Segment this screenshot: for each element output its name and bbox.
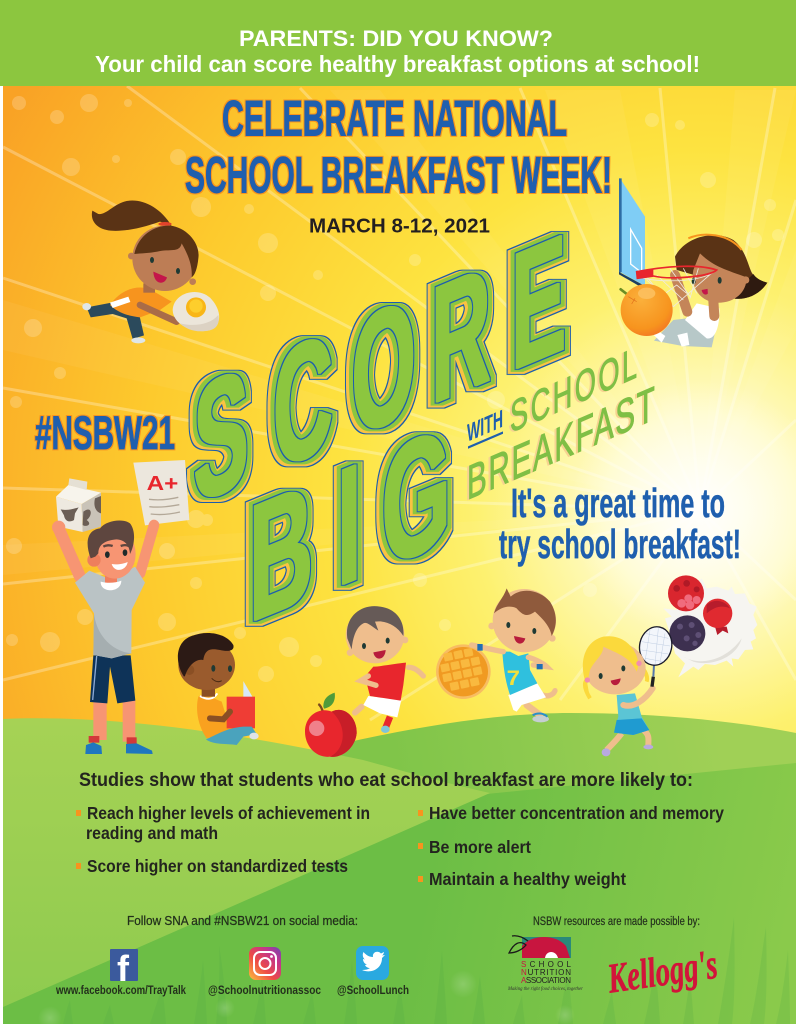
logo: Kellogg's: Kellogg's (604, 942, 720, 1003)
social handles: @Schoolnutritionassoc (208, 983, 321, 997)
date: MARCH 8-12, 2021 (309, 214, 490, 238)
social media heading: Follow SNA and #NSBW21 on social media: (127, 913, 358, 928)
character: boy with waffle (472, 588, 556, 722)
benefits list: left column: Reach higher levels of achievement in (87, 803, 370, 823)
social handles: www.facebook.com/TrayTalk (55, 983, 186, 997)
sponsors heading: NSBW resources are made possible by: (533, 916, 700, 928)
icon: facebook (110, 948, 138, 989)
logo lettering: SCORE: SCORE (193, 200, 565, 541)
logo: School Nutrition Association: Making the right food choices, together (507, 987, 583, 992)
icon: facebook: f (117, 948, 130, 989)
benefits list: right column: Be more alert (429, 837, 531, 857)
character: girl with egg (82, 201, 219, 343)
character: boy running (346, 606, 423, 733)
logo lettering: BIG: BIG (248, 392, 450, 659)
title: Celebrate National School Breakfast Week (185, 90, 612, 204)
logo: School Nutrition Association: NUTRITION (521, 968, 571, 977)
A+ paper (133, 460, 189, 525)
logo: School Nutrition Association: S CHOOL (521, 960, 572, 969)
logo lettering: with school breakfast: SCHOOL (510, 337, 637, 442)
logo lettering: with school breakfast: BREAKFAST (467, 376, 655, 511)
icon: twitter (356, 946, 389, 980)
icon: instagram (249, 947, 281, 980)
A+ paper: A+ (147, 472, 178, 495)
benefits list: right column (418, 803, 724, 889)
header banner (0, 0, 796, 86)
header banner: Your child can score healthy breakfast options at school! (95, 51, 700, 77)
icon: apple (305, 693, 357, 757)
character: girl with tennis racket (583, 624, 675, 756)
logo lettering: with school breakfast: WITH (467, 404, 503, 448)
benefits list: left column (76, 803, 370, 876)
boy body (59, 530, 80, 577)
hashtag: #NSBW21 (35, 406, 175, 459)
benefits heading: Studies show that students who eat school breakfast are more likely to: (79, 769, 693, 791)
logo: School Nutrition Association (507, 936, 583, 992)
benefits list: left column: Score higher on standardized tests (87, 856, 348, 876)
title: Celebrate National School Breakfast Week: CELEBRATE NATIONAL (222, 90, 567, 146)
icon: berries and milk splash (663, 575, 757, 677)
tagline (499, 480, 741, 567)
character: boy reading (178, 633, 259, 745)
social handles: @SchoolLunch (337, 983, 409, 997)
benefits list: right column: Maintain a healthy weight (429, 869, 626, 889)
character: girl dunking orange (619, 178, 767, 347)
character: boy with waffle: 7 (507, 666, 520, 690)
header banner: PARENTS: DID YOU KNOW? (239, 26, 553, 51)
milk carton (56, 478, 101, 532)
logo: School Nutrition Association: ASSOCIATION (521, 976, 571, 985)
character: boy with milk and A+ paper (52, 460, 189, 754)
icon: waffle (436, 644, 491, 699)
benefits list: right column: Have better concentration and memory (429, 803, 724, 823)
social handles (55, 983, 409, 997)
grass blades (63, 917, 790, 1024)
benefits list: left column: reading and math (86, 823, 218, 843)
ground: green hills and lower field (3, 713, 796, 1024)
grass light blooms (38, 970, 575, 1024)
